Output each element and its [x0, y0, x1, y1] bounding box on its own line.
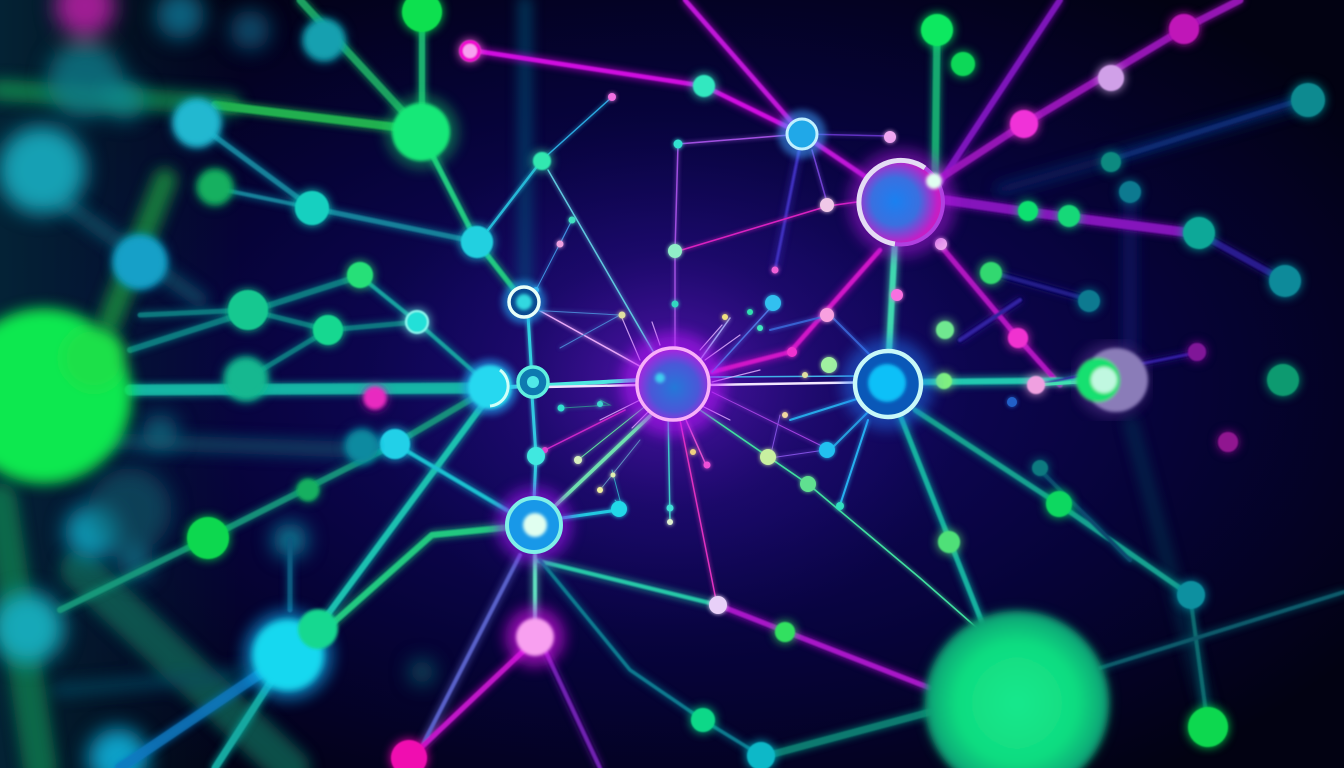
far blurred background nodes — [0, 0, 434, 768]
main horizontal beam — [490, 376, 885, 388]
central hub node — [621, 332, 725, 436]
top-left green node — [386, 96, 458, 168]
right ringed hub — [842, 338, 934, 430]
large green blurred node, bottom right — [925, 611, 1109, 768]
ringed node: small junction — [518, 367, 548, 397]
magenta glowing node, bottom — [505, 607, 565, 667]
ringed node: upper left — [502, 280, 546, 324]
central radial sparks — [600, 318, 760, 428]
central fine connections — [488, 97, 1110, 635]
blurred mixed node, right — [1076, 344, 1148, 416]
ringed node: lower junction — [496, 487, 572, 563]
large green blurred node, left — [0, 308, 132, 484]
ringed node: left junction — [462, 359, 518, 415]
top ringed node — [778, 110, 826, 158]
cyan and green blurred node, lower left — [242, 609, 338, 701]
small node dots — [527, 93, 1017, 614]
upper right ringed hub — [848, 149, 956, 257]
